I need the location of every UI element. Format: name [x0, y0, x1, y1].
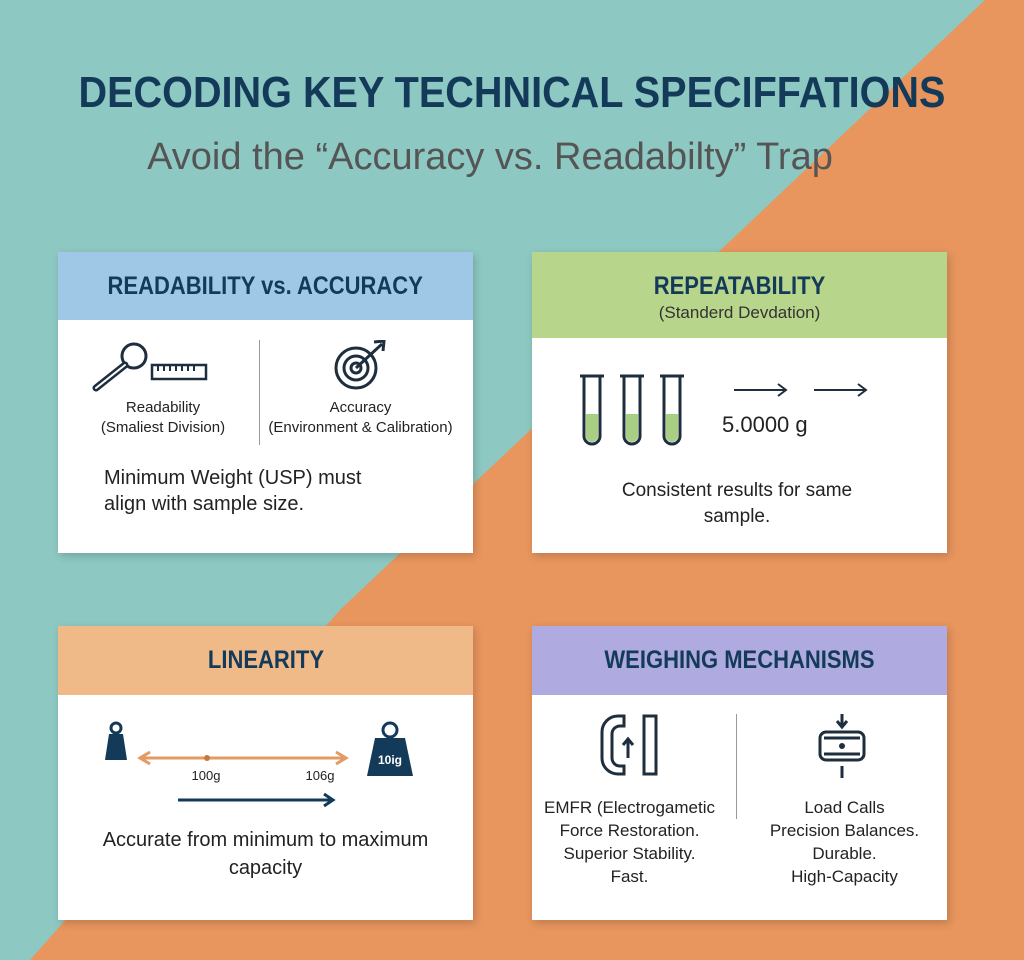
text: load cells: Durable.	[812, 844, 877, 863]
text: accuracy: Accuracy	[330, 399, 391, 416]
value: 5.0000 g	[722, 412, 808, 437]
text: accurate: capacity	[229, 857, 302, 879]
text: consistent: Consistent results for same	[622, 480, 852, 501]
panel: readability vs accuracy	[58, 252, 473, 553]
icon: target	[334, 340, 386, 390]
text: consistent	[622, 480, 852, 527]
title: DECODING KEY TECHNICAL SPECIFFATIONS	[79, 68, 945, 117]
icon: EMFR	[600, 714, 658, 776]
text: accuracy: (Environment & Calibration)	[268, 419, 453, 436]
icon: magnifier and ruler	[92, 342, 208, 392]
linearity diagram	[105, 722, 413, 808]
text: consistent: sample.	[704, 506, 770, 527]
heading: REPEATABILITY	[654, 272, 825, 300]
text: accurate: Accurate from minimum to maximum	[103, 829, 428, 851]
heading: WEIGHING MECHANISMS	[604, 646, 875, 674]
panel: weighing mechanisms	[532, 626, 947, 920]
text: readability	[101, 399, 225, 436]
linearity diagram: 106g	[306, 768, 334, 783]
heading	[58, 252, 473, 320]
text: readability: Readability	[126, 399, 200, 416]
heading: READABILITY vs. ACCURACY	[108, 272, 423, 300]
text: load cells: High-Capacity	[791, 867, 898, 886]
text: load cells: Precision Balances.	[770, 821, 919, 840]
icon: load cell	[818, 714, 866, 778]
text: readability: (Smaliest Division)	[101, 419, 225, 436]
text: EMFR: EMFR (Electrogametic	[544, 798, 715, 817]
heading	[532, 252, 947, 338]
text: accuracy	[268, 399, 453, 436]
heading: LINEARITY	[207, 646, 324, 674]
subtitle: Avoid the “Accuracy vs. Readabilty” Trap	[147, 136, 833, 178]
text: EMFR	[544, 798, 715, 886]
text: EMFR: Fast.	[611, 867, 648, 886]
text: EMFR: Superior Stability.	[564, 844, 695, 863]
panel: repeatability	[532, 252, 947, 553]
text: minimum weight: Minimum Weight (USP) must	[104, 467, 361, 489]
icon: test tubes	[580, 374, 684, 446]
text: minimum weight	[104, 467, 362, 515]
heading	[58, 626, 473, 695]
linearity diagram: 100g	[192, 768, 220, 783]
heading	[532, 626, 947, 695]
panel: linearity	[58, 626, 473, 920]
linearity diagram: 10ig	[378, 753, 402, 767]
heading: (Standerd Devdation)	[659, 303, 820, 322]
text: load cells	[770, 798, 919, 886]
text: load cells: Load Calls	[804, 798, 885, 817]
arrows	[734, 383, 868, 397]
text: minimum weight: align with sample size.	[104, 493, 304, 515]
text: EMFR: Force Restoration.	[560, 821, 699, 840]
text: accurate	[102, 829, 428, 879]
